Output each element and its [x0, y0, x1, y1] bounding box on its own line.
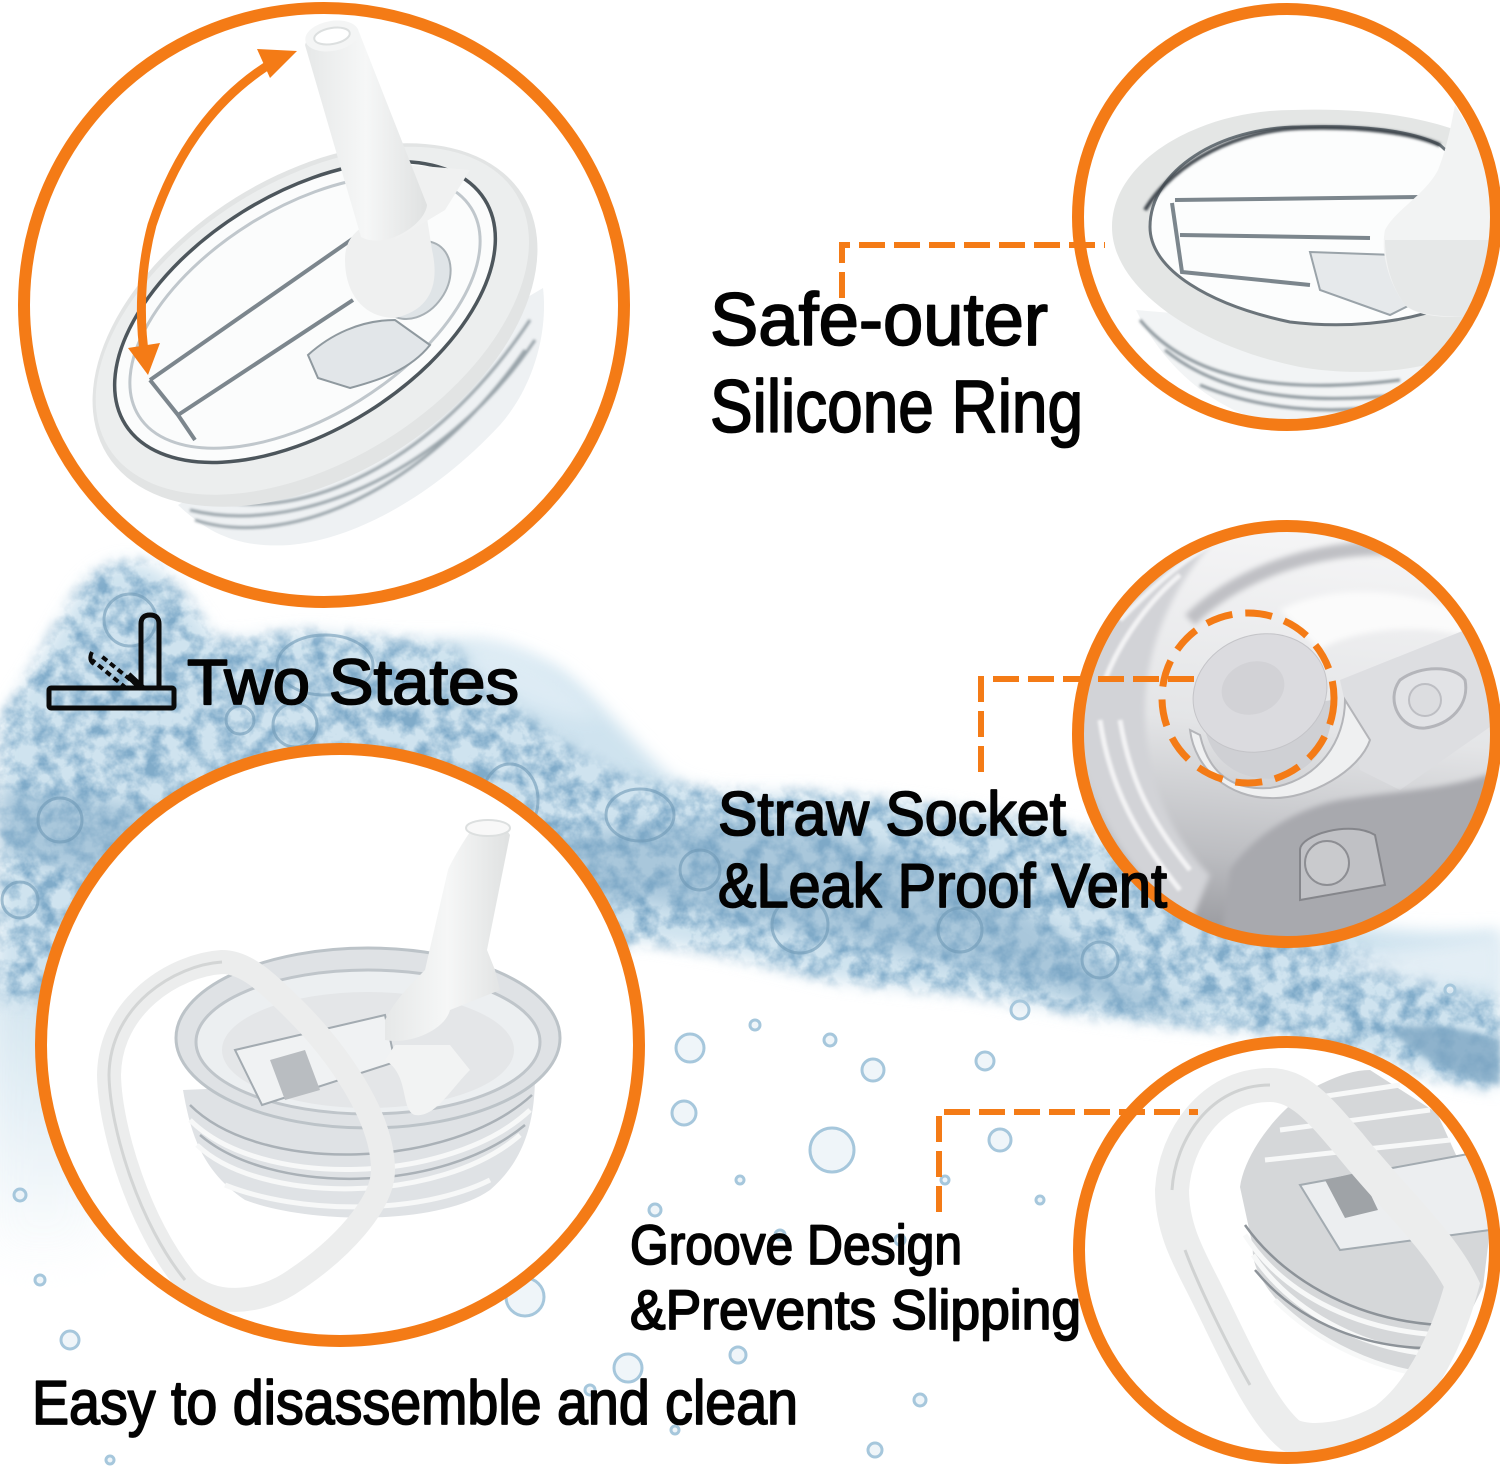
groove close-up	[1172, 1070, 1490, 1440]
panel: groove design detail	[1079, 1042, 1495, 1458]
panel: lid with ring removed	[41, 749, 639, 1341]
heading: two states: Two States	[187, 646, 519, 718]
caption: easy to clean: Easy to disassemble and clean	[32, 1369, 798, 1438]
two-way arrow	[128, 49, 297, 375]
label: straw socket: Straw Socket	[718, 780, 1066, 849]
water ring swirls	[2, 594, 1118, 978]
panel: straw socket detail	[1078, 525, 1500, 950]
label: straw socket: &Leak Proof Vent	[718, 852, 1167, 921]
socket close-up	[1078, 525, 1500, 950]
disassembled lid and ring	[109, 820, 560, 1300]
panel: lid with straw, two states	[24, 8, 624, 602]
label: silicone ring	[710, 278, 1083, 448]
icon: straw position	[49, 615, 174, 708]
connector: silicone ring	[842, 245, 1105, 298]
dashed highlight circle	[1162, 613, 1334, 783]
label: groove design	[630, 1213, 1081, 1341]
connector: straw socket	[981, 679, 1200, 772]
label: groove design: &Prevents Slipping	[630, 1278, 1081, 1341]
connector: groove design	[939, 1112, 1198, 1212]
label: groove design: Groove Design	[630, 1213, 962, 1276]
panel: silicone ring detail	[1078, 9, 1500, 430]
label: silicone ring: Safe-outer	[710, 278, 1048, 361]
lid close-up	[1112, 105, 1500, 430]
bubbles	[14, 985, 1455, 1464]
label: straw socket	[718, 780, 1167, 921]
lid illustration	[92, 20, 544, 546]
label: silicone ring: Silicone Ring	[710, 365, 1083, 448]
